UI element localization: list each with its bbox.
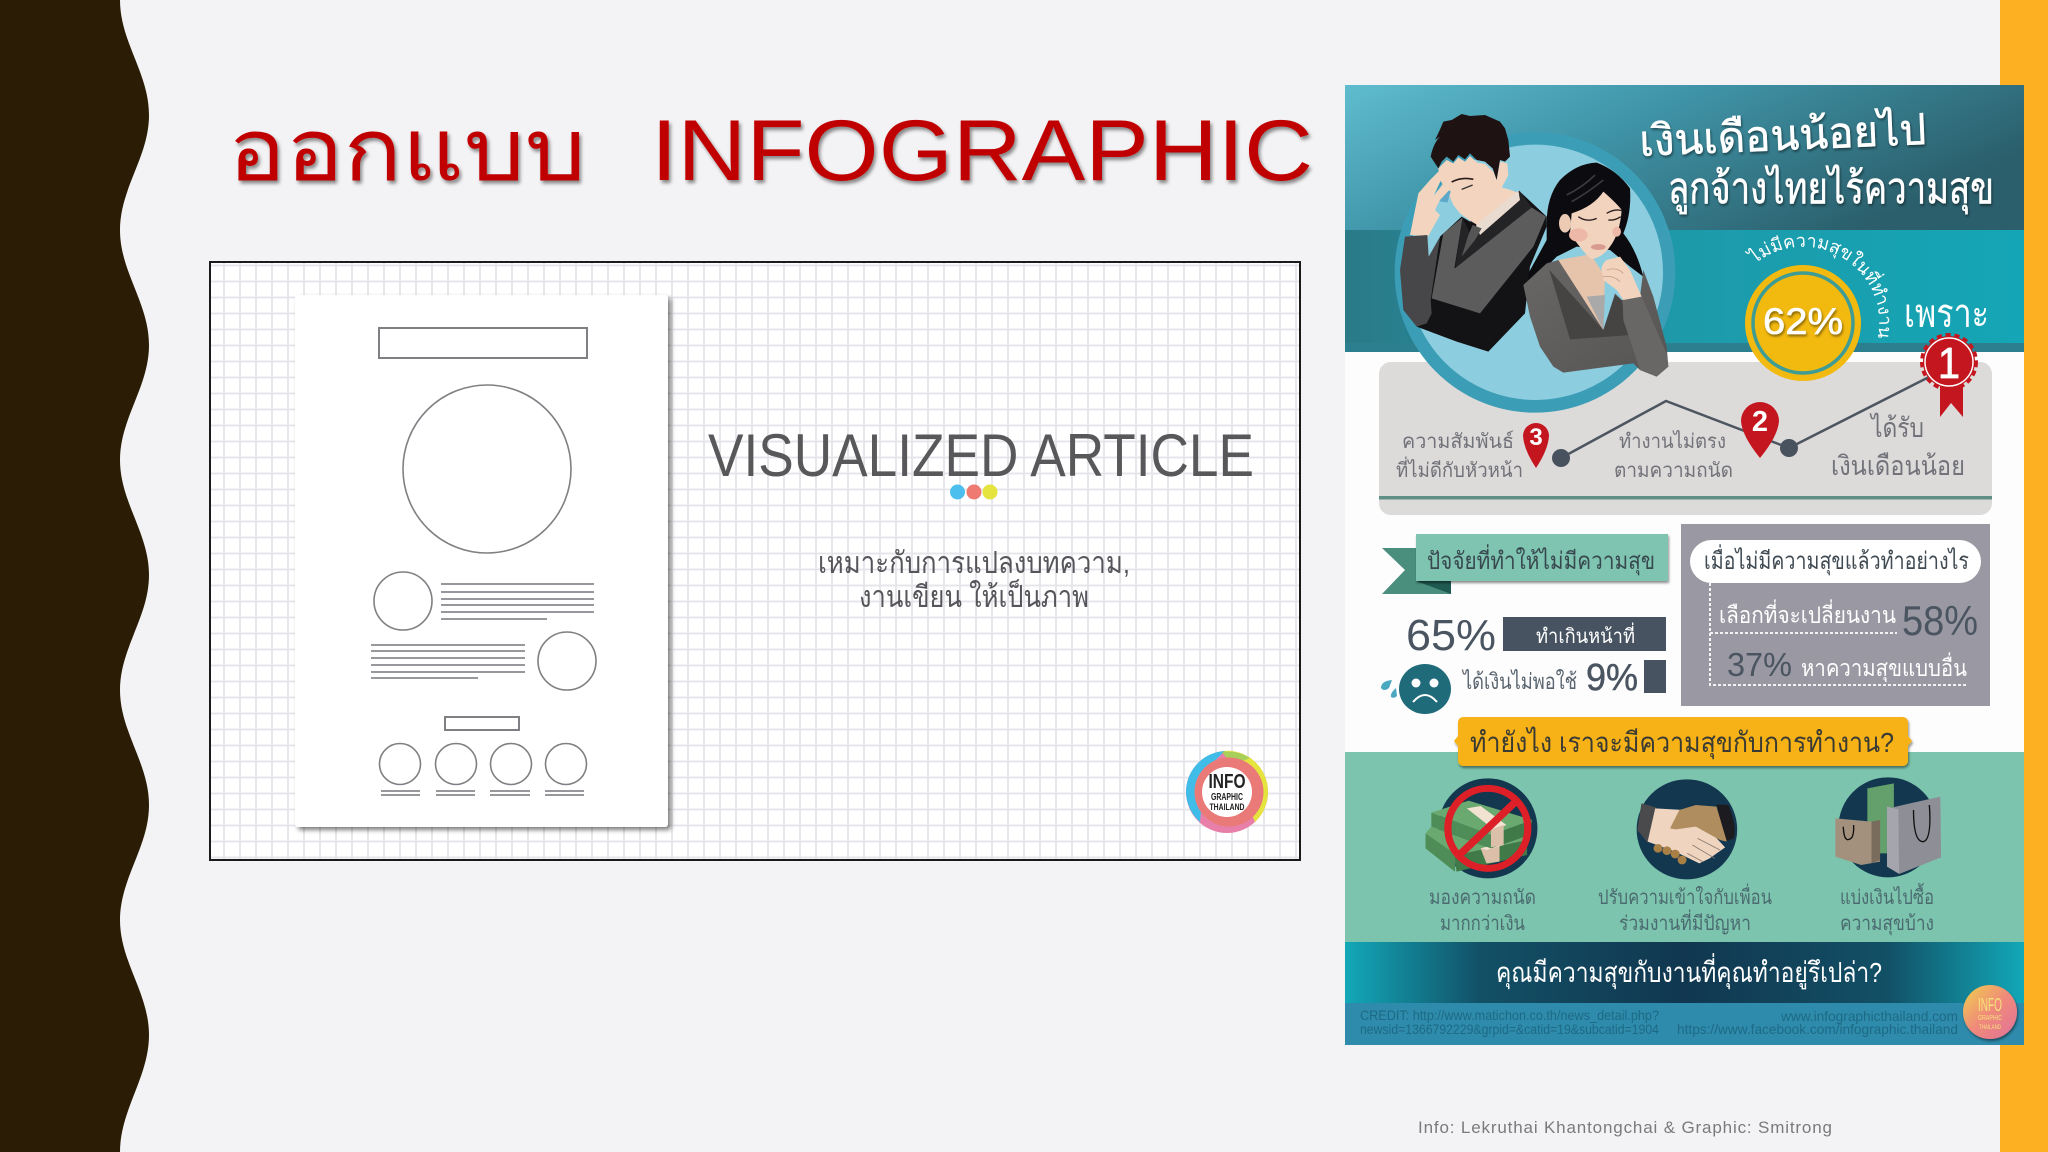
footer with credits: www.infographicthailand.com bbox=[1780, 1008, 1958, 1024]
title: low salary, unhappy Thai employees: เงินเดือนน้อยไป bbox=[1638, 105, 1927, 166]
logo: infographic thailand: THAILAND bbox=[1210, 802, 1245, 813]
panel: what to do when unhappy bbox=[1681, 524, 1990, 706]
title: low salary, unhappy Thai employees bbox=[1638, 105, 1994, 215]
right orange band bbox=[2000, 0, 2048, 1152]
small logo: THAILAND bbox=[1979, 1025, 2001, 1031]
reason 3 text bbox=[1396, 430, 1523, 482]
medal: rank 1: 1 bbox=[1938, 339, 1960, 388]
stat: 9 percent not enough money: 9% bbox=[1586, 657, 1638, 699]
tip 1 label: มองความถนัด bbox=[1429, 887, 1536, 909]
ribbon heading: factors of unhappiness bbox=[1382, 534, 1668, 594]
reason 1 text: เงินเดือนน้อย bbox=[1831, 451, 1965, 481]
panel: what to do when unhappy: หาความสุขแบบอื่น bbox=[1801, 652, 1967, 682]
tip 1 label bbox=[1429, 887, 1536, 935]
ranking line chart bbox=[1552, 377, 1929, 467]
pin: rank 3 bbox=[1523, 423, 1549, 468]
panel: what to do when unhappy: 58% bbox=[1902, 597, 1978, 644]
label: because: เพราะ bbox=[1904, 292, 1989, 336]
tip 3 label bbox=[1840, 883, 1934, 936]
icon: shopping bags bbox=[1835, 777, 1941, 877]
footer with credits: CREDIT: http://www.matichon.co.th/news_detail.php? bbox=[1360, 1007, 1659, 1023]
reason 1 text: ได้รับ bbox=[1869, 413, 1924, 443]
badge: 62 percent bbox=[1745, 265, 1861, 381]
reason 3 text: ความสัมพันธ์ bbox=[1402, 430, 1514, 453]
footer with credits bbox=[1345, 1003, 2024, 1045]
stat: 9 percent not enough money bbox=[1461, 657, 1666, 699]
small logo: INFO bbox=[1978, 995, 2002, 1015]
medal: rank 1 bbox=[1923, 336, 1975, 417]
green tips section bbox=[1345, 752, 2024, 942]
small logo: GRAPHIC bbox=[1978, 1015, 2002, 1022]
panel: what to do when unhappy: เมื่อไม่มีความสุขแล้วทำอย่างไร bbox=[1704, 544, 1969, 576]
pin: rank 3: 3 bbox=[1529, 424, 1543, 451]
badge: 62 percent: 62% bbox=[1763, 301, 1843, 342]
title bbox=[228, 103, 1313, 199]
three colored dots bbox=[950, 484, 998, 500]
pin: rank 2 bbox=[1741, 402, 1779, 458]
description text: งานเขียน ให้เป็นภาพ bbox=[859, 578, 1089, 614]
tip 2 label: ปรับความเข้าใจกับเพื่อน bbox=[1598, 883, 1772, 909]
man bbox=[1400, 114, 1547, 352]
tip 3 label: แบ่งเงินไปซื้อ bbox=[1840, 883, 1934, 909]
grey ranking panel bbox=[1379, 362, 1992, 515]
description text bbox=[818, 547, 1130, 614]
title: ออกแบบ bbox=[228, 103, 586, 199]
closing question banner: คุณมีความสุขกับงานที่คุณทำอยู่รึเปล่า? bbox=[1496, 953, 1882, 990]
paper template wireframe bbox=[295, 295, 668, 827]
reason 2 text bbox=[1614, 430, 1733, 482]
left wavy brown band bbox=[0, 0, 149, 1152]
yellow question banner: ทำยังไง เราจะมีความสุขกับการทำงาน? bbox=[1470, 727, 1894, 760]
yellow question banner bbox=[1454, 717, 1912, 766]
pin: rank 2: 2 bbox=[1752, 406, 1768, 438]
logo: infographic thailand bbox=[1186, 751, 1268, 833]
grid background bbox=[210, 262, 1300, 860]
reason 3 text: ที่ไม่ดีกับหัวหน้า bbox=[1396, 456, 1523, 482]
tip 2 label bbox=[1598, 883, 1772, 935]
ribbon heading: factors of unhappiness: ปัจจัยที่ทำให้ไม่มีความสุข bbox=[1427, 544, 1655, 576]
footer with credits: newsid=1366792229&grpid=&catid=19&subcatid=1904 bbox=[1360, 1021, 1659, 1037]
reason 1 text bbox=[1831, 413, 1965, 481]
icon: sad face bbox=[1381, 664, 1451, 714]
stat: 9 percent not enough money: ได้เงินไม่พอใช้ bbox=[1461, 669, 1577, 694]
logo: infographic thailand: GRAPHIC bbox=[1211, 792, 1243, 803]
reason 2 text: ทำงานไม่ตรง bbox=[1619, 430, 1726, 453]
header background bbox=[1345, 85, 2024, 352]
logo: infographic thailand: INFO bbox=[1208, 771, 1246, 793]
tip 3 label: ความสุขบ้าง bbox=[1840, 913, 1934, 936]
icon: handshake bbox=[1637, 779, 1737, 879]
panel: what to do when unhappy: เลือกที่จะเปลี่ยนงาน bbox=[1719, 599, 1896, 628]
stat: 65 percent overwork: 65% bbox=[1406, 611, 1496, 660]
arc label: unhappy at work: ไม่มีความสุขในที่ทำงาน bbox=[1744, 235, 1890, 338]
reason 2 text: ตามความถนัด bbox=[1614, 460, 1733, 482]
panel: what to do when unhappy: 37% bbox=[1727, 646, 1792, 683]
description text: เหมาะกับการแปลงบทความ, bbox=[818, 547, 1130, 580]
panel: infographic poster bbox=[1345, 85, 2024, 1045]
tip 2 label: ร่วมงานที่มีปัญหา bbox=[1619, 909, 1751, 935]
heading: visualized article: VISUALIZED ARTICLE bbox=[708, 422, 1254, 489]
woman bbox=[1523, 163, 1668, 377]
tip 1 label: มากกว่าเงิน bbox=[1440, 913, 1525, 935]
title: INFOGRAPHIC bbox=[651, 103, 1313, 199]
stat: 65 percent overwork bbox=[1406, 611, 1666, 660]
closing question banner bbox=[1345, 942, 2024, 1003]
footer with credits: https://www.facebook.com/infographic.thailand bbox=[1677, 1021, 1958, 1037]
stat: 65 percent overwork: ทำเกินหน้าที่ bbox=[1536, 622, 1635, 648]
panel: visualized article bbox=[210, 262, 1300, 860]
credit line: Info: Lekruthai Khantongchai & Graphic: Smitrong bbox=[1418, 1118, 1832, 1137]
small logo bbox=[1963, 985, 2017, 1039]
poster white base bbox=[1345, 85, 2024, 1045]
illustration: stressed man and woman bbox=[1395, 114, 1675, 413]
icon: money with prohibition sign bbox=[1425, 778, 1537, 878]
